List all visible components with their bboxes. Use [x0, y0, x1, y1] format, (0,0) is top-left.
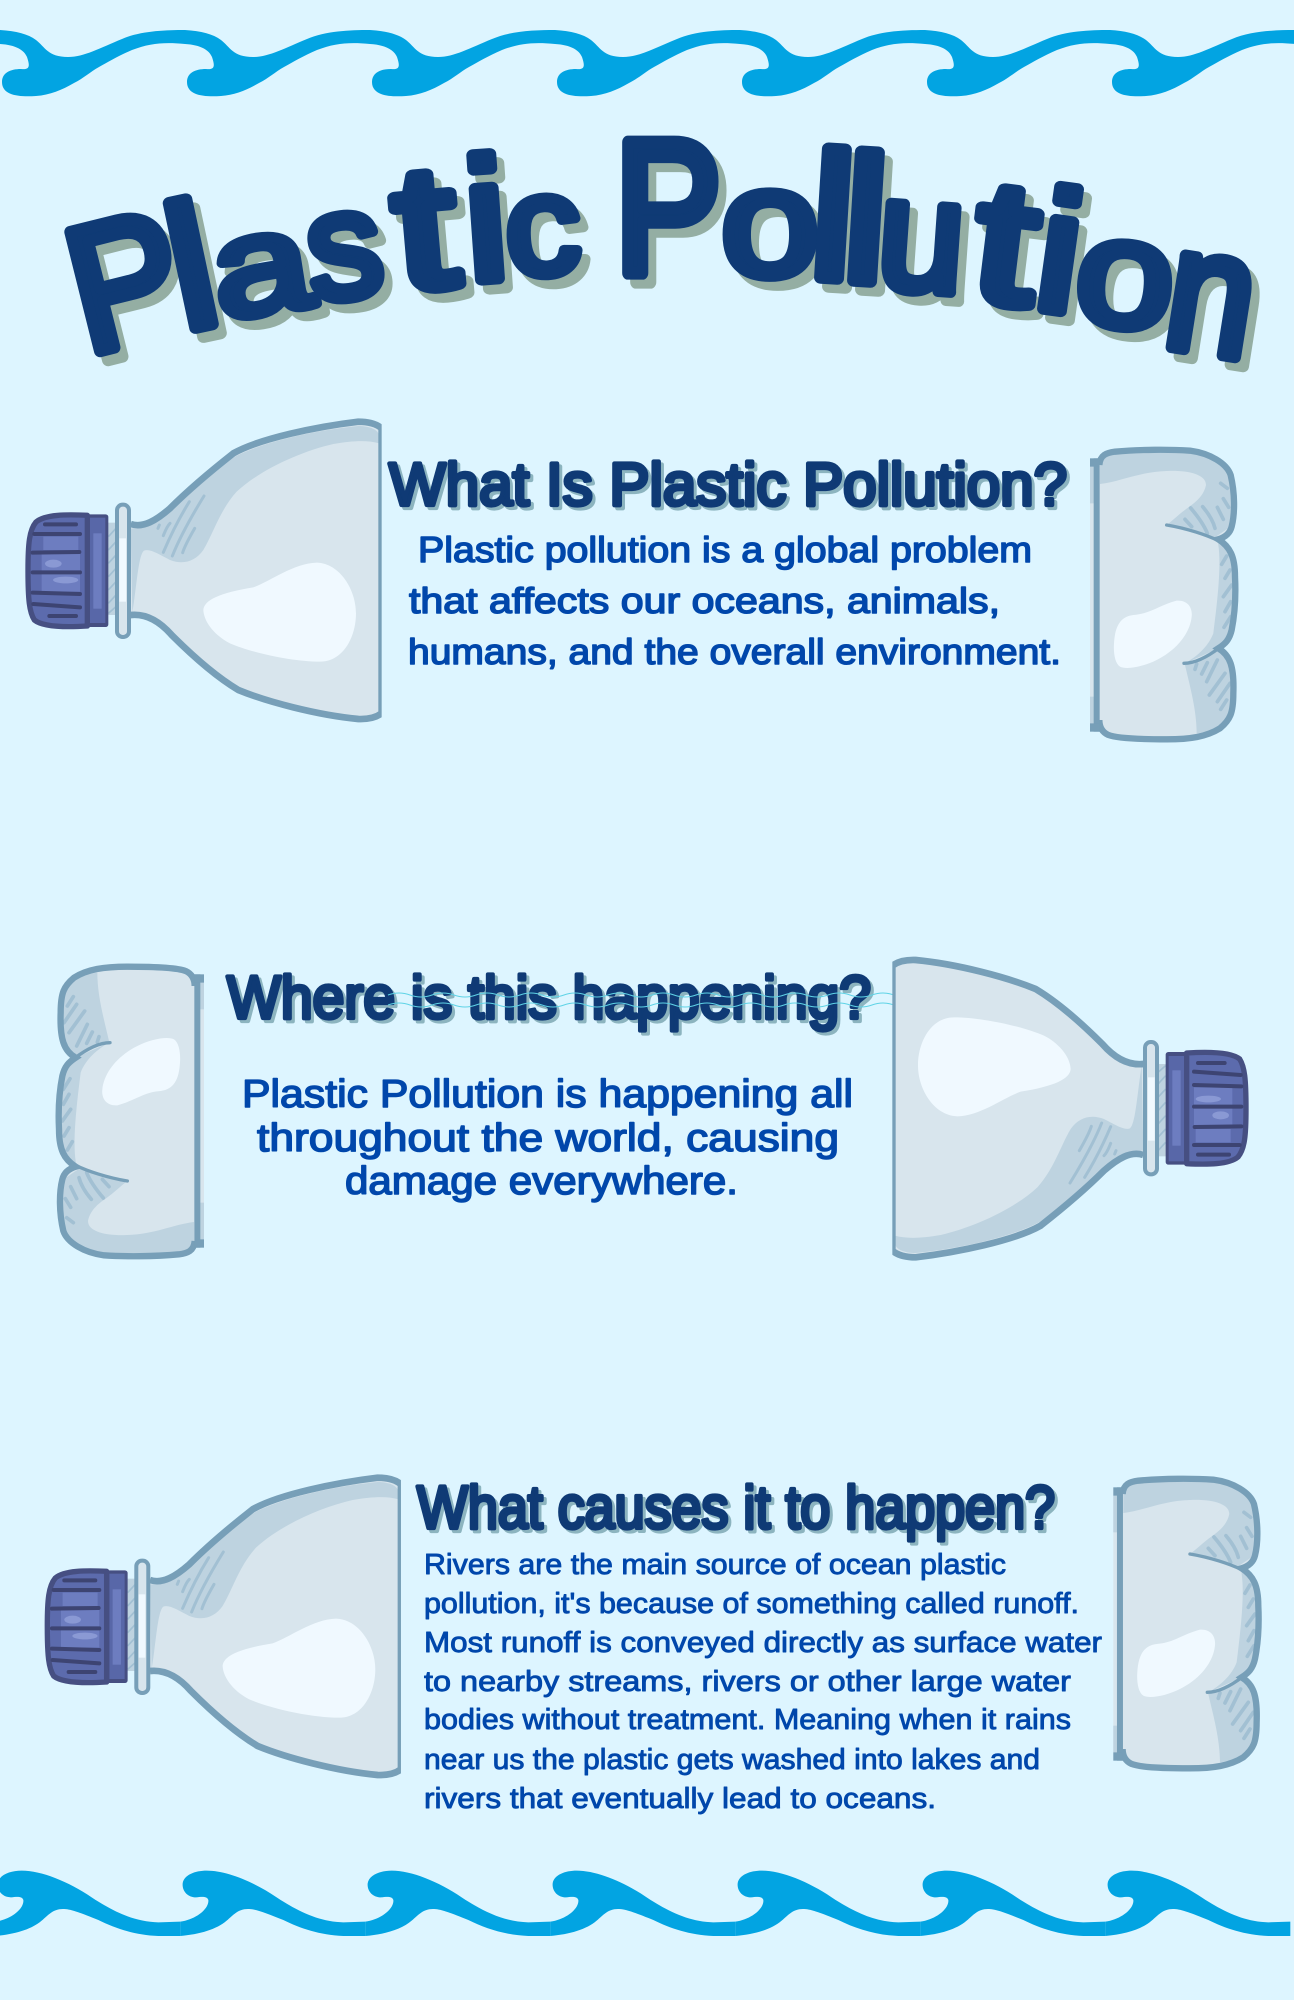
title: Plastic Pollution: c — [501, 144, 584, 306]
icon: bottle bottom half, section 1 — [1090, 450, 1235, 739]
text block: section 1 body: that affects our oceans, animals, — [409, 580, 1000, 621]
icon: bottle neck half, section 3 — [47, 1478, 401, 1775]
text block: section 3 body: Rivers are the main source of ocean plastic — [424, 1549, 1006, 1581]
title: Plastic Pollution: t — [964, 142, 1048, 343]
decorative wavy water lines over heading — [388, 993, 894, 1007]
heading: What causes it to happen?: What causes it to happen? — [417, 1474, 1055, 1541]
title: Plastic Pollution: i — [1026, 156, 1094, 349]
text block: section 1 body: Plastic pollution is a global problem — [418, 529, 1032, 570]
text block: section 2 body — [242, 1073, 853, 1203]
title: Plastic Pollution: P — [615, 102, 721, 314]
title: Plastic Pollution: n — [1154, 189, 1270, 396]
title: Plastic Pollution: o — [721, 136, 819, 308]
icon: bottle neck half, section 1 — [28, 422, 382, 719]
text block: section 3 body — [424, 1549, 1102, 1815]
title: Plastic Pollution: P — [48, 173, 203, 392]
text block: section 3 body: rivers that eventually lead to oceans. — [424, 1783, 936, 1815]
text block: section 1 body — [408, 529, 1061, 672]
top wave border — [0, 30, 1294, 96]
title: Plastic Pollution: l — [806, 117, 860, 318]
heading: Where is this happening?: Where is this happening? — [227, 964, 871, 1031]
title: Plastic Pollution: a — [200, 179, 322, 349]
title: Plastic Pollution: t — [386, 128, 464, 327]
text block: section 3 body: bodies without treatment. Meaning when it rains — [424, 1704, 1071, 1736]
text block: section 3 body: Most runoff is conveyed directly as surface water — [424, 1627, 1102, 1659]
bottom wave border — [0, 1871, 1290, 1936]
title: Plastic Pollution: o — [1070, 184, 1182, 363]
icon: bottle bottom half, section 3 — [1113, 1479, 1259, 1768]
text block: section 3 body: pollution, it's because of something called runoff. — [424, 1588, 1079, 1620]
text block: section 2 body: Plastic Pollution is happening all — [242, 1073, 853, 1116]
icon: bottle neck half, section 2 — [892, 960, 1246, 1257]
title: Plastic Pollution: s — [296, 156, 391, 335]
text block: section 1 body: humans, and the overall environment. — [408, 631, 1061, 672]
icon: bottle bottom half, section 2 — [59, 967, 204, 1256]
title: Plastic Pollution: i — [458, 123, 514, 317]
text block: section 3 body: to nearby streams, rivers or other large water — [424, 1666, 1071, 1698]
heading: What Is Plastic Pollution?: What Is Plastic Pollution? — [389, 451, 1067, 518]
title: Plastic Pollution: l — [839, 120, 893, 321]
text block: section 2 body: damage everywhere. — [345, 1160, 738, 1203]
title: Plastic Pollution: l — [150, 166, 232, 367]
text block: section 2 body: throughout the world, causing — [257, 1117, 839, 1160]
text block: section 3 body: near us the plastic gets washed into lakes and — [424, 1744, 1040, 1776]
title: Plastic Pollution: u — [873, 143, 971, 327]
title: Plastic Pollution — [48, 102, 1270, 396]
